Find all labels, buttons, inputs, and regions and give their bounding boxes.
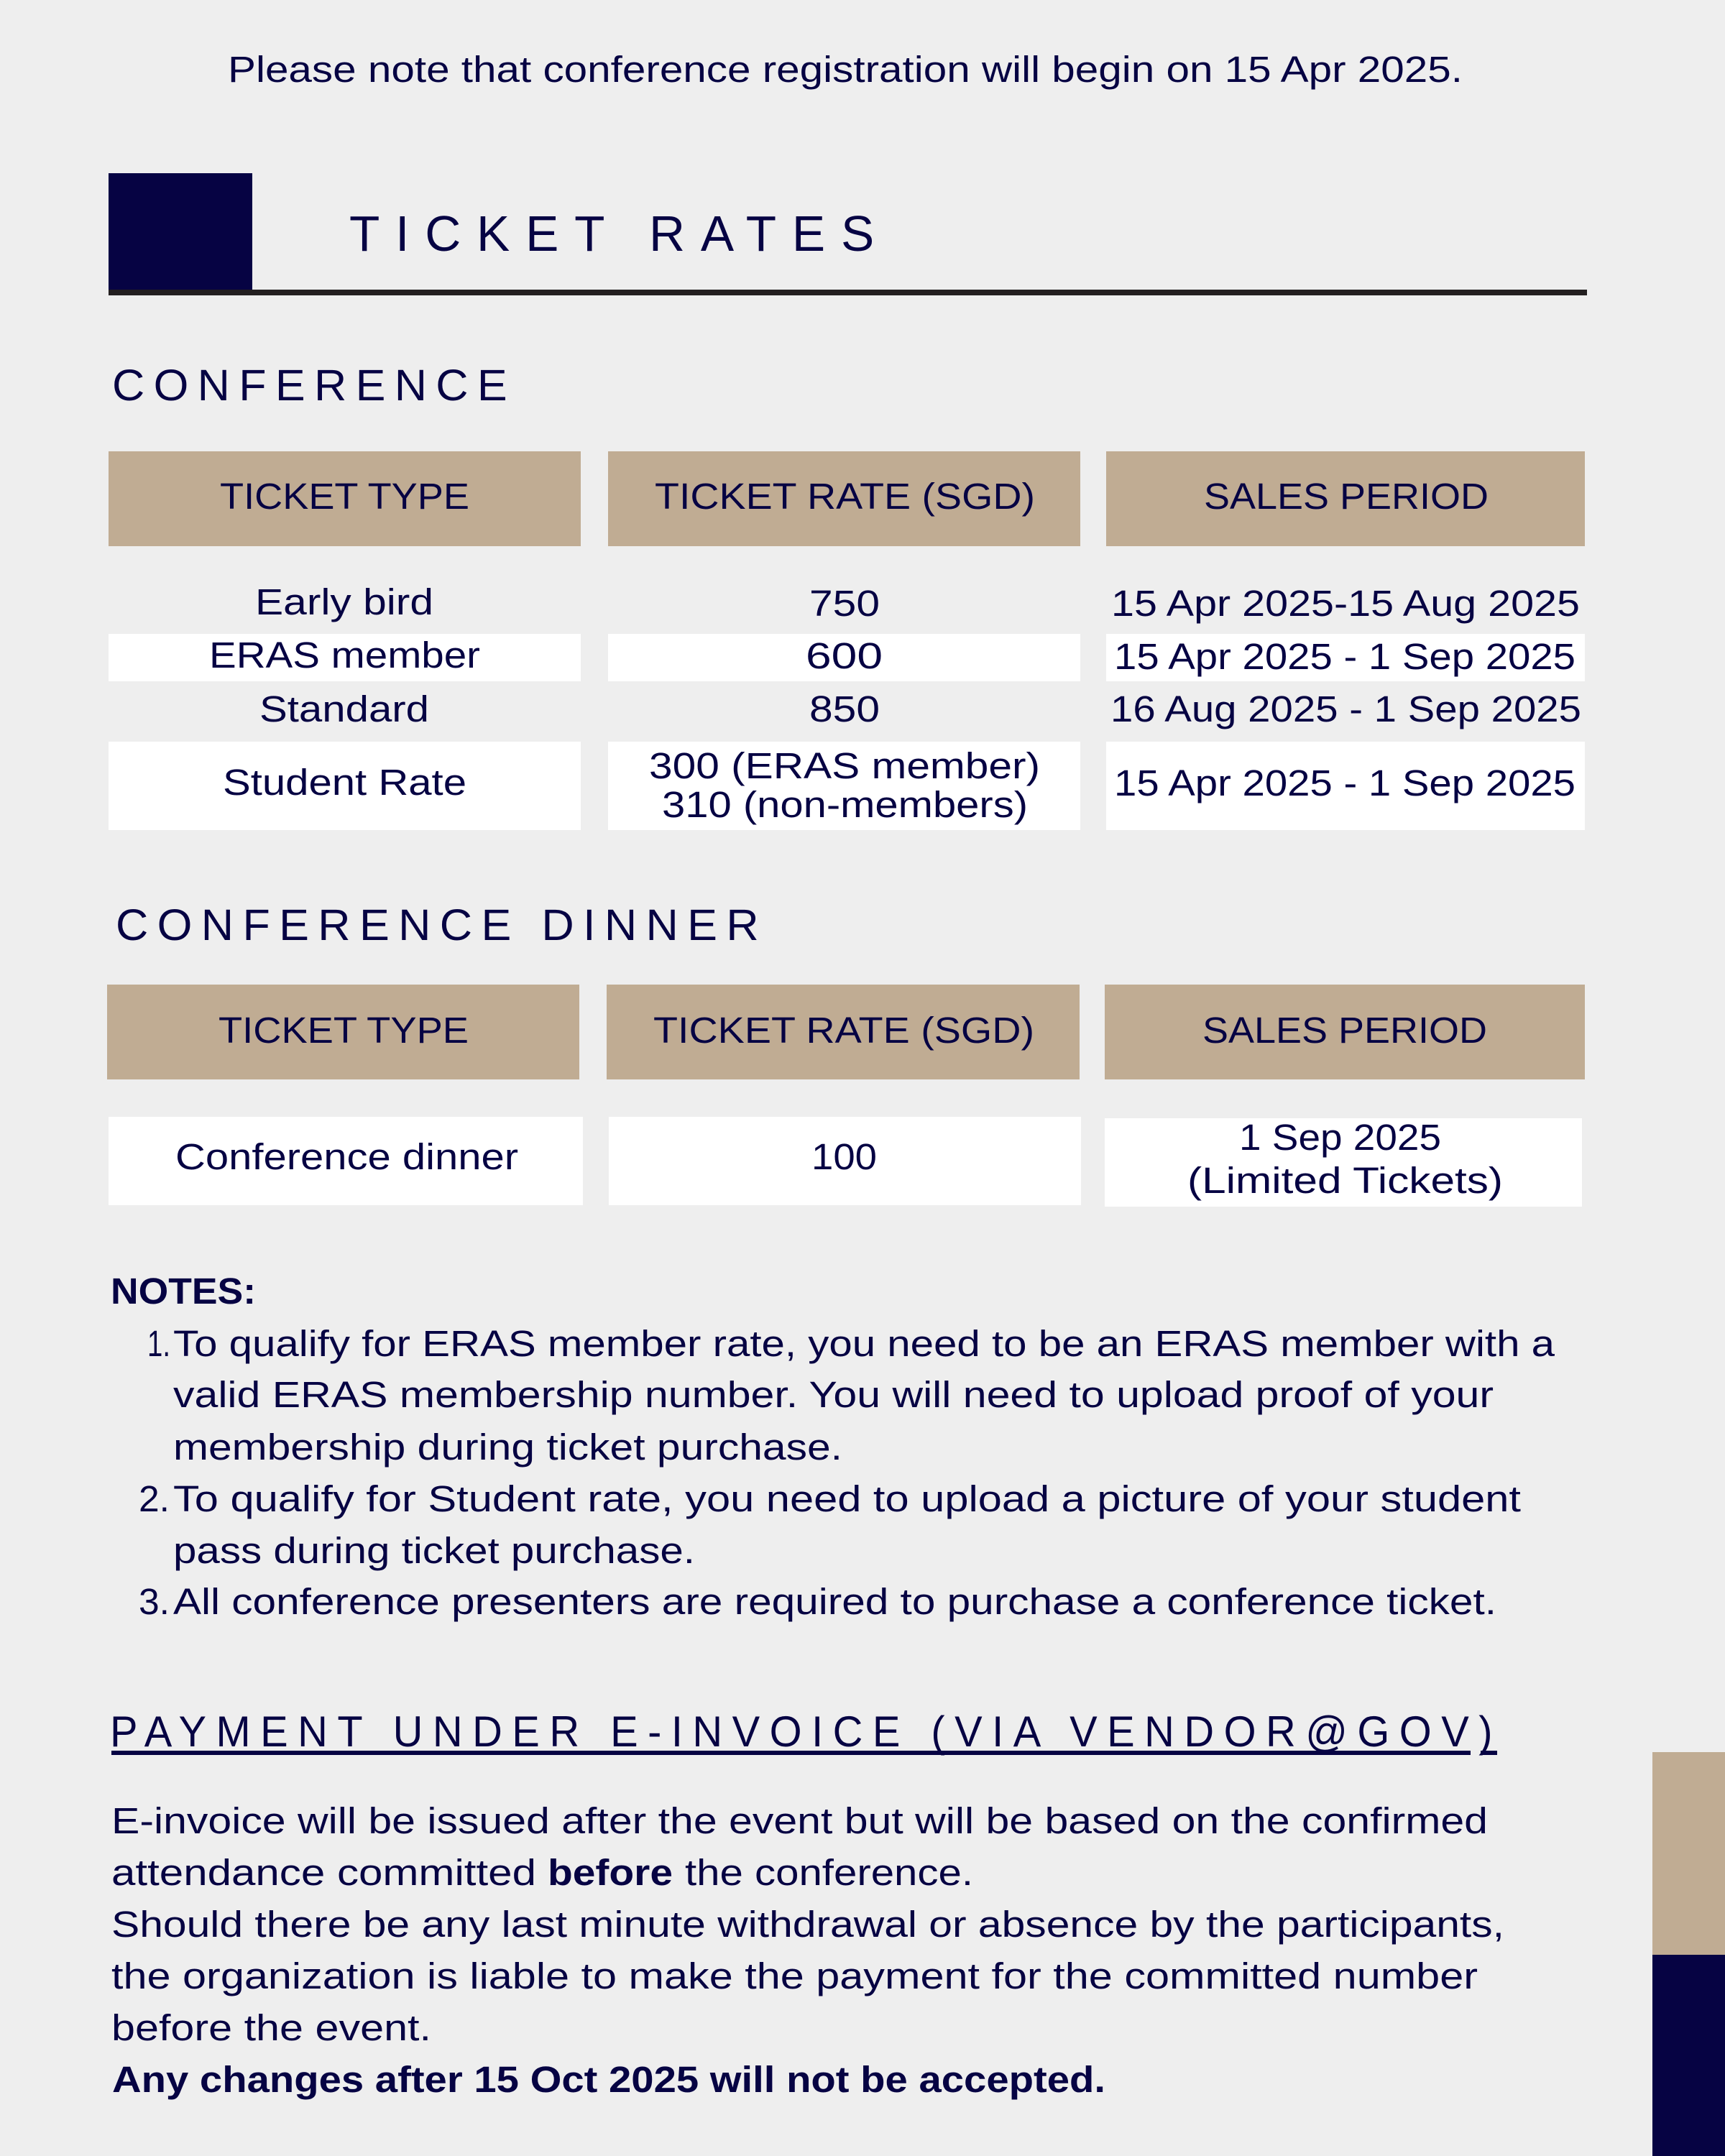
note 2 — [139, 1478, 1521, 1571]
payment terms text: before the event. — [111, 2007, 431, 2048]
row: ERAS member: ERAS member — [209, 635, 480, 676]
row: ERAS member: 15 Apr 2025 - 1 Sep 2025 — [1114, 636, 1576, 677]
header row: TICKET TYPE — [220, 476, 469, 517]
row: early bird: Early bird — [255, 581, 433, 622]
row: ERAS member — [109, 634, 1585, 681]
payment terms text: the organization is liable to make the payment for the committed number — [111, 1955, 1478, 1996]
heading: conference dinner: CONFERENCE DINNER — [116, 900, 768, 949]
row: student rate: 310 (non-members) — [662, 784, 1028, 825]
row: student rate: 15 Apr 2025 - 1 Sep 2025 — [1114, 763, 1576, 803]
row: early bird: 750 — [809, 583, 880, 624]
header row: TICKET TYPE — [218, 1010, 469, 1051]
row: standard: Standard — [259, 688, 429, 729]
row: conference dinner: 100 — [811, 1136, 877, 1177]
row: standard — [259, 688, 1581, 729]
header row: TICKET RATE (SGD) — [655, 476, 1035, 517]
payment terms text: Any changes after 15 Oct 2025 will not be accepted. — [112, 2059, 1105, 2100]
note 1: To qualify for ERAS member rate, you need to be an ERAS member with a — [173, 1323, 1555, 1364]
payment terms text: Should there be any last minute withdrawal or absence by the participants, — [111, 1904, 1504, 1945]
header row: SALES PERIOD — [1202, 1010, 1487, 1051]
header row — [109, 451, 1585, 546]
note 3: 3. — [139, 1581, 170, 1622]
note 1: valid ERAS membership number. You will need to upload proof of your — [173, 1374, 1494, 1415]
notes heading: NOTES: — [111, 1271, 256, 1312]
table: conference dinner tickets — [107, 985, 1585, 1207]
row: student rate: Student Rate — [223, 762, 466, 803]
header row — [107, 985, 1585, 1079]
heading: conference: CONFERENCE — [112, 361, 516, 410]
row: early bird — [255, 581, 1580, 624]
row: conference dinner: 1 Sep 2025 — [1239, 1117, 1441, 1158]
row: conference dinner: (Limited Tickets) — [1187, 1160, 1503, 1201]
row: student rate — [109, 742, 1585, 830]
header row: TICKET RATE (SGD) — [653, 1010, 1034, 1051]
payment terms text: before — [548, 1852, 673, 1893]
row: ERAS member: 600 — [806, 635, 883, 676]
section header: ticket rates — [109, 173, 1587, 295]
row: conference dinner: Conference dinner — [175, 1136, 518, 1177]
note 1: membership during ticket purchase. — [173, 1427, 842, 1468]
section header: ticket rates: TICKET RATES — [349, 206, 890, 262]
note 2: To qualify for Student rate, you need to upload a picture of your student — [173, 1478, 1521, 1519]
decorative colour block: corner — [1652, 1752, 1725, 2156]
payment terms text: E-invoice will be issued after the event but will be based on the confirmed — [111, 1800, 1488, 1841]
payment terms text: attendance committed — [111, 1852, 536, 1893]
payment terms text — [111, 1800, 1504, 2100]
notes — [111, 1271, 1555, 1622]
table: conference tickets — [109, 451, 1585, 830]
heading: payment under e-invoice: PAYMENT UNDER E-INVOICE (VIA VENDOR@GOV) — [110, 1708, 1502, 1756]
note 1 — [147, 1323, 1555, 1468]
payment terms text: the conference. — [685, 1852, 973, 1893]
registration notice: Please note that conference registration will begin on 15 Apr 2025. — [228, 49, 1463, 90]
note 1: 1. — [147, 1323, 170, 1364]
header row: SALES PERIOD — [1204, 476, 1489, 517]
note 2: 2. — [139, 1478, 170, 1519]
row: student rate: 300 (ERAS member) — [649, 745, 1040, 786]
row: standard: 850 — [809, 688, 880, 729]
row: conference dinner — [109, 1117, 1582, 1207]
row: standard: 16 Aug 2025 - 1 Sep 2025 — [1110, 688, 1581, 729]
note 3: All conference presenters are required to purchase a conference ticket. — [173, 1581, 1496, 1622]
row: early bird: 15 Apr 2025-15 Aug 2025 — [1111, 583, 1580, 624]
note 2: pass during ticket purchase. — [173, 1530, 695, 1571]
